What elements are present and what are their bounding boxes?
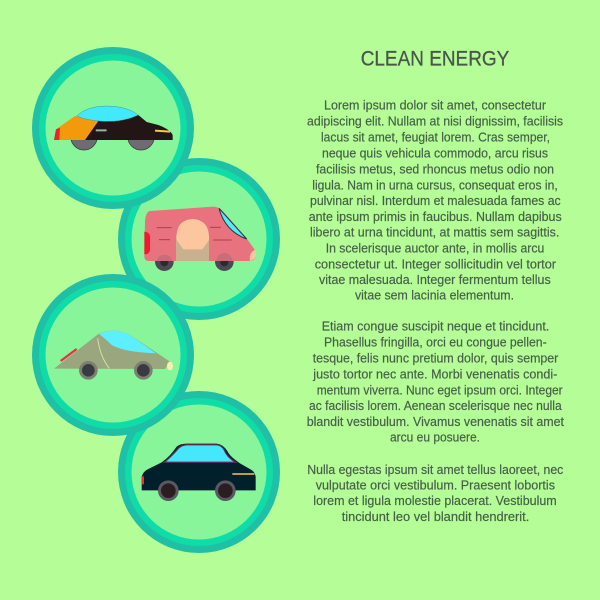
text block: paragraph 1: facilisis metus, sed rhoncus metus odio non [316,161,554,176]
text block: paragraph 1: vitae malesuada. Integer fermentum tellus [319,272,551,287]
text block: paragraph 1: ante ipsum primis in faucibus. Nullam dapibus [309,209,562,224]
icon: olive concept car [54,331,173,380]
text block: paragraph 2: tesque, felis nunc pretium dolor, quis semper [313,351,559,366]
text block: paragraph 2: justo tortor nec ante. Morbi venenatis condi- [312,366,557,381]
text block: paragraph 1: neque quis vehicula commodo, arcu risus [322,145,548,160]
text block: paragraph 1: adipiscing elit. Nullam at nisi dignissim, facilisis [307,113,563,128]
title: CLEAN ENERGY [361,46,509,70]
icon: orange and black sports car [54,106,173,150]
circle: concept car [32,274,194,436]
text block: paragraph 3: lorem et ligula molestie placerat. Vestibulum [313,493,557,508]
text block: paragraph 1: vitae sem lacinia elementum. [355,287,514,302]
text block: paragraph 2: mentum viverra. Nunc eget ipsum orci. Integer [317,382,563,397]
text block: paragraph 2: blandit vestibulum. Vivamus venenatis sit amet [307,414,564,429]
text block: paragraph 1: Lorem ipsum dolor sit amet, consectetur [324,97,547,112]
circle: sports car [32,47,194,209]
text block: paragraph 1: In scelerisque auctor ante, in mollis arcu [326,240,544,255]
text block: paragraph 1 [307,97,563,302]
text block: paragraph 1: ligula. Nam in urna cursus, consequat eros in, [312,177,558,192]
circle: sedan [118,391,280,553]
text block: paragraph 1: consectetur ut. Integer sollicitudin vel tortor [315,256,557,271]
text block: paragraph 2: Etiam congue suscipit neque et tincidunt. [322,319,549,334]
text block: paragraph 2: arcu eu posuere. [390,430,480,445]
text block: paragraph 3: Nulla egestas ipsum sit amet tellus laoreet, nec [307,462,564,477]
circle: van [118,158,280,320]
text block: paragraph 3 [307,462,564,524]
text block: paragraph 2 [307,319,564,445]
text block: paragraph 3: vulputate orci vestibulum. Praesent lobortis [316,477,555,492]
text block: paragraph 1: lacus sit amet, feugiat lorem. Cras semper, [321,129,550,144]
text block: paragraph 2: ac facilisis lorem. Aenean scelerisque nec nulla [309,398,562,413]
icon: black sedan [142,444,256,501]
icon: pink van [144,207,256,271]
text block: paragraph 2: Phasellus fringilla, orci eu congue pellen- [324,335,547,350]
text block: paragraph 3: tincidunt leo vel blandit hendrerit. [342,509,529,524]
text block: paragraph 1: pulvinar nisl. Interdum et malesuada fames ac [310,193,561,208]
text block: paragraph 1: libero at urna tincidunt, at mattis sem sagittis. [310,225,559,240]
